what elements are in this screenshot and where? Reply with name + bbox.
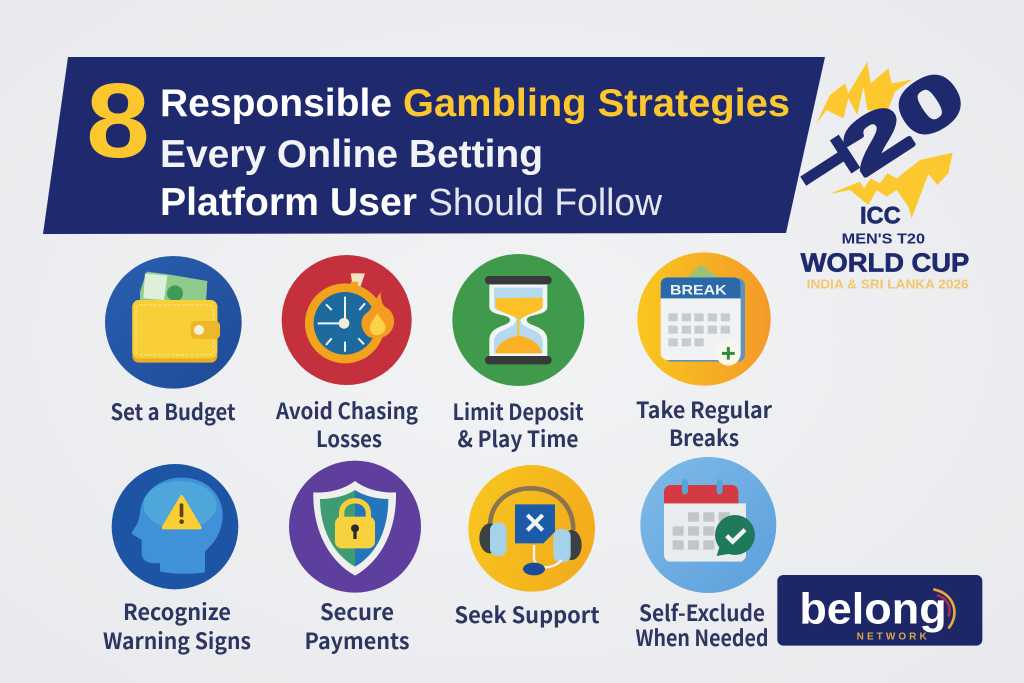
label: Take Regular Breaks: Take Regular (636, 393, 772, 425)
icon: wallet (105, 256, 242, 389)
label: Limit Deposit & Play Time: & Play Time (458, 422, 578, 454)
label: Recognize Warning Signs (103, 595, 251, 656)
label: Take Regular Breaks: Breaks (669, 421, 739, 453)
label: Recognize Warning Signs: Recognize (123, 595, 231, 627)
title line 1 yellow: Gambling Strategies (403, 82, 790, 125)
label: Take Regular Breaks (636, 393, 772, 453)
label: Limit Deposit & Play Time: Limit Deposit (452, 395, 584, 427)
calendar heading: BREAK (670, 281, 727, 297)
label: Limit Deposit & Play Time (452, 395, 584, 454)
title line 2: Every Online Betting (160, 133, 543, 176)
label: Self-Exclude When Needed: Self-Exclude (639, 596, 765, 628)
icon: support headset (468, 465, 595, 592)
label: Self-Exclude When Needed (636, 596, 768, 653)
label: Secure Payments: Payments (304, 624, 410, 656)
label: Recognize Warning Signs: Warning Signs (103, 624, 251, 656)
icon: hourglass (452, 254, 584, 386)
signal arcs (933, 589, 954, 628)
big number 8: 8 (86, 62, 150, 180)
label: Set a Budget: Set a Budget (110, 395, 236, 427)
label: Self-Exclude When Needed: When Needed (636, 621, 768, 653)
title banner (43, 57, 825, 234)
logo: belong network (777, 575, 982, 646)
network tagline: NETWORK (857, 632, 927, 643)
label: Avoid Chasing Losses (275, 394, 418, 454)
India and Sri Lanka 2026: INDIA & SRI LANKA 2026 (807, 277, 969, 291)
icon: stopwatch with flame (282, 255, 412, 385)
label: Seek Support: Seek Support (454, 598, 600, 630)
T20 World Cup logo (779, 54, 979, 291)
label: Secure Payments: Secure (320, 595, 394, 627)
T letter: T (779, 127, 872, 207)
Men's T20: MEN'S T20 (842, 231, 925, 247)
icon: shield with padlock (289, 461, 421, 593)
belong wordmark: belong (799, 584, 947, 633)
title line 3 bold: Platform User (160, 181, 417, 224)
icon: head with warning (112, 464, 238, 589)
lower lightning bolt (829, 153, 953, 218)
label: Secure Payments (304, 595, 410, 656)
20 numerals: 20 (828, 54, 979, 191)
World Cup: WORLD CUP (801, 248, 969, 278)
title line 1 white: Responsible (160, 82, 392, 125)
label: Avoid Chasing Losses: Losses (316, 422, 382, 454)
label: Avoid Chasing Losses: Avoid Chasing (275, 394, 418, 426)
icon: calendar with check badge (640, 457, 776, 593)
upper lightning bolt (816, 62, 913, 124)
icon: break calendar (637, 252, 771, 386)
ICC: ICC (860, 202, 901, 229)
title line 3 regular: Should Follow (428, 182, 663, 224)
